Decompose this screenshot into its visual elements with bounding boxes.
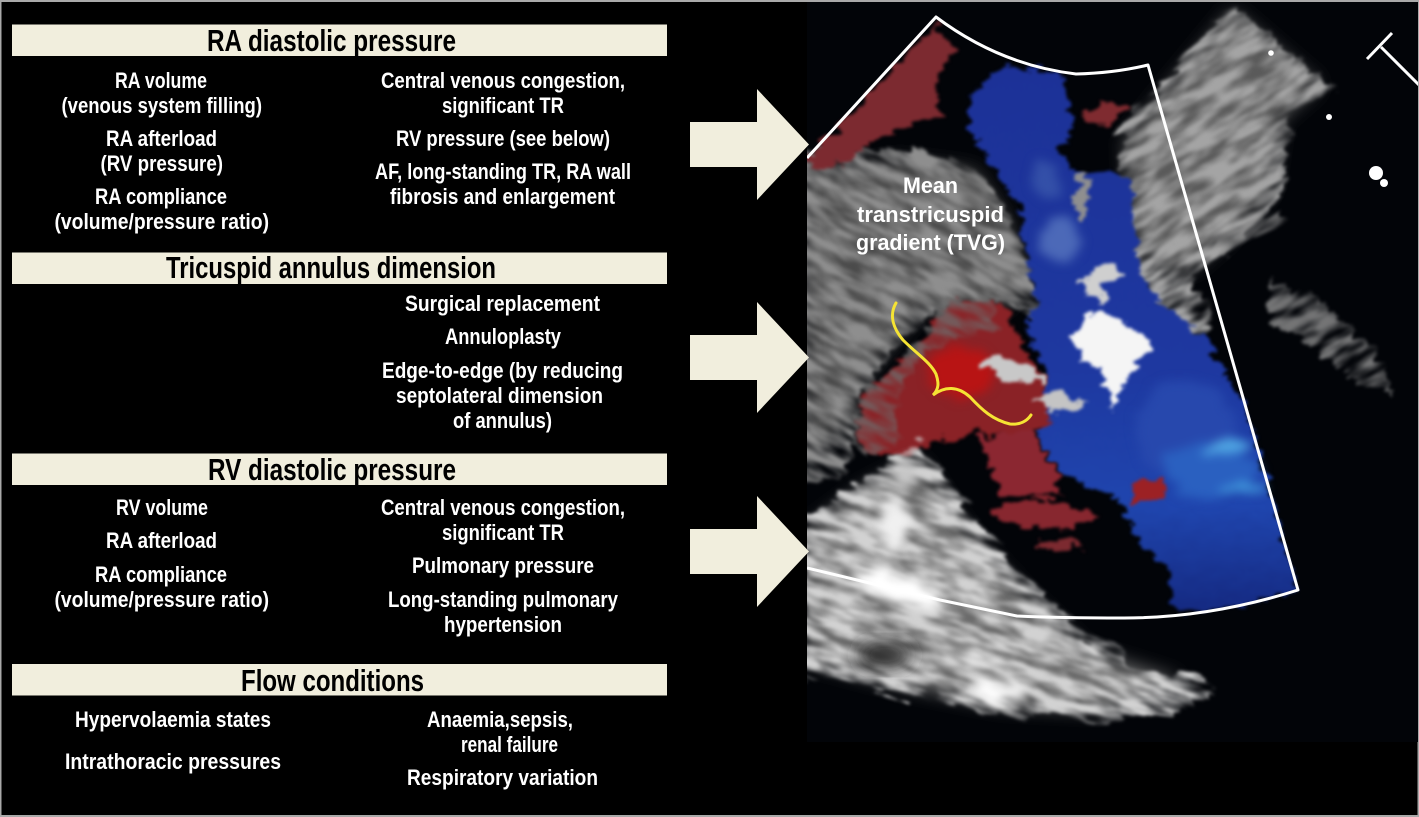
section: RV diastolic pressure: Pulmonary pressure	[412, 553, 594, 578]
section: RV diastolic pressure: RA afterload	[106, 528, 217, 553]
section: Flow conditions: Flow conditions	[241, 663, 424, 698]
section: RA diastolic pressure: (venous system filling)	[62, 93, 262, 118]
blue colour Doppler jet	[966, 66, 1298, 616]
section: RV diastolic pressure: significant TR	[442, 520, 564, 545]
white echoes in the centre	[975, 170, 1152, 412]
section: Flow conditions: renal failure	[461, 732, 558, 757]
yellow tricuspid valve leaflet curve	[892, 303, 1031, 424]
section: RA diastolic pressure: RA volume	[115, 68, 207, 93]
section: RV diastolic pressure: Central venous congestion,	[381, 495, 625, 520]
section: RV diastolic pressure: Long-standing pulmonary	[388, 587, 619, 612]
lower left tissue base tone	[807, 460, 1180, 710]
bright specular echoes lower left	[847, 461, 1027, 705]
section: RA diastolic pressure: fibrosis and enlargement	[390, 184, 616, 209]
section: Tricuspid annulus dimension: Surgical replacement	[405, 291, 601, 316]
section: RA diastolic pressure	[12, 23, 667, 234]
arrow: RV diastolic pressure to image	[690, 496, 809, 607]
section: RA diastolic pressure: significant TR	[442, 93, 564, 118]
image caption	[856, 173, 1005, 255]
left gray myocardium tissue	[807, 144, 1041, 485]
panel: echocardiogram image	[807, 2, 1418, 742]
section: RV diastolic pressure: (volume/pressure ratio)	[54, 587, 269, 612]
section: Tricuspid annulus dimension: of annulus)	[453, 408, 552, 433]
section: RV diastolic pressure: RV volume	[116, 495, 208, 520]
section: Tricuspid annulus dimension: septolateral dimension	[396, 383, 603, 408]
red colour Doppler flow top left	[807, 24, 1130, 168]
section: Tricuspid annulus dimension	[12, 250, 667, 433]
section: RV diastolic pressure: RA compliance	[95, 562, 227, 587]
section: Tricuspid annulus dimension: Annuloplasty	[445, 324, 562, 349]
white sector outline	[807, 17, 1298, 618]
section: RV diastolic pressure	[12, 452, 667, 637]
section: Tricuspid annulus dimension: Edge-to-edge (by reducing	[382, 358, 623, 383]
red Doppler flow centre	[855, 300, 1168, 550]
arrow: RA diastolic pressure to image	[690, 89, 809, 200]
section: Flow conditions: Intrathoracic pressures	[65, 749, 281, 774]
section: RA diastolic pressure: (volume/pressure ratio)	[54, 209, 269, 234]
section: RA diastolic pressure: RA afterload	[106, 126, 217, 151]
section: RA diastolic pressure: AF, long-standing TR, RA wall	[375, 159, 631, 184]
image caption: gradient (TVG)	[856, 230, 1005, 255]
section: Flow conditions: Hypervolaemia states	[75, 707, 271, 732]
small bright marker dots	[1268, 50, 1388, 187]
upper right gray tissue strip	[1111, 6, 1337, 336]
base tone of upper right strip	[1125, 10, 1320, 270]
section: RA diastolic pressure: Central venous congestion,	[381, 68, 625, 93]
section: Flow conditions: Anaemia,sepsis,	[427, 707, 573, 732]
section: RA diastolic pressure: (RV pressure)	[100, 151, 223, 176]
image caption: Mean	[903, 173, 958, 198]
section: Flow conditions	[12, 663, 667, 790]
base tone of left tissue	[807, 160, 1030, 450]
gray mottling over the red flow	[852, 298, 1002, 457]
section: RA diastolic pressure: RA compliance	[95, 184, 227, 209]
section: Tricuspid annulus dimension: Tricuspid annulus dimension	[166, 250, 496, 285]
section: RA diastolic pressure: RV pressure (see below)	[396, 126, 610, 151]
bright red core	[926, 348, 994, 396]
faint right gray streaks	[1216, 210, 1394, 398]
lighter blue highlights	[1031, 162, 1264, 498]
T-shaped orientation marker	[1367, 33, 1419, 85]
lower left bright tissue	[807, 434, 1216, 727]
section: RA diastolic pressure: RA diastolic pressure	[207, 23, 456, 58]
section: RV diastolic pressure: hypertension	[444, 612, 562, 637]
section: RV diastolic pressure: RV diastolic pressure	[208, 452, 456, 487]
section: Flow conditions: Respiratory variation	[407, 765, 598, 790]
dark patch in lower tissue	[857, 641, 913, 669]
arrow: tricuspid annulus to image	[690, 302, 809, 413]
image caption: transtricuspid	[857, 202, 1004, 227]
